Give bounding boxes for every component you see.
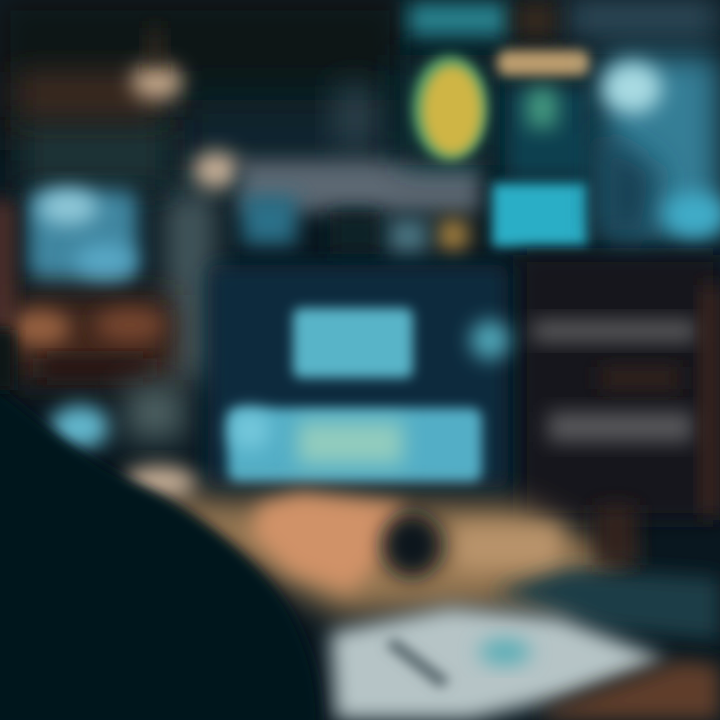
- left shelf and lamps: [15, 28, 240, 189]
- icon: yellow pie chart: [412, 55, 488, 161]
- left screen: [28, 189, 138, 282]
- screen panel: lower bar: [228, 408, 482, 482]
- wooden table corner: [540, 660, 720, 720]
- grey band behind monitor: [240, 160, 480, 254]
- hanging lamp: [497, 0, 590, 76]
- mouse / dark object on desk: [382, 513, 442, 577]
- screen panel: upper: [293, 308, 413, 378]
- paper on desk: [330, 607, 668, 720]
- hand: [252, 492, 405, 592]
- right shelves: [520, 255, 720, 520]
- top-right screens: [400, 0, 720, 247]
- person silhouette: [0, 200, 320, 720]
- dark device right: [495, 505, 720, 640]
- left brown shelves: [10, 295, 185, 449]
- desk: [124, 466, 630, 615]
- screen panel: small: [470, 320, 510, 360]
- central monitor: [208, 265, 510, 487]
